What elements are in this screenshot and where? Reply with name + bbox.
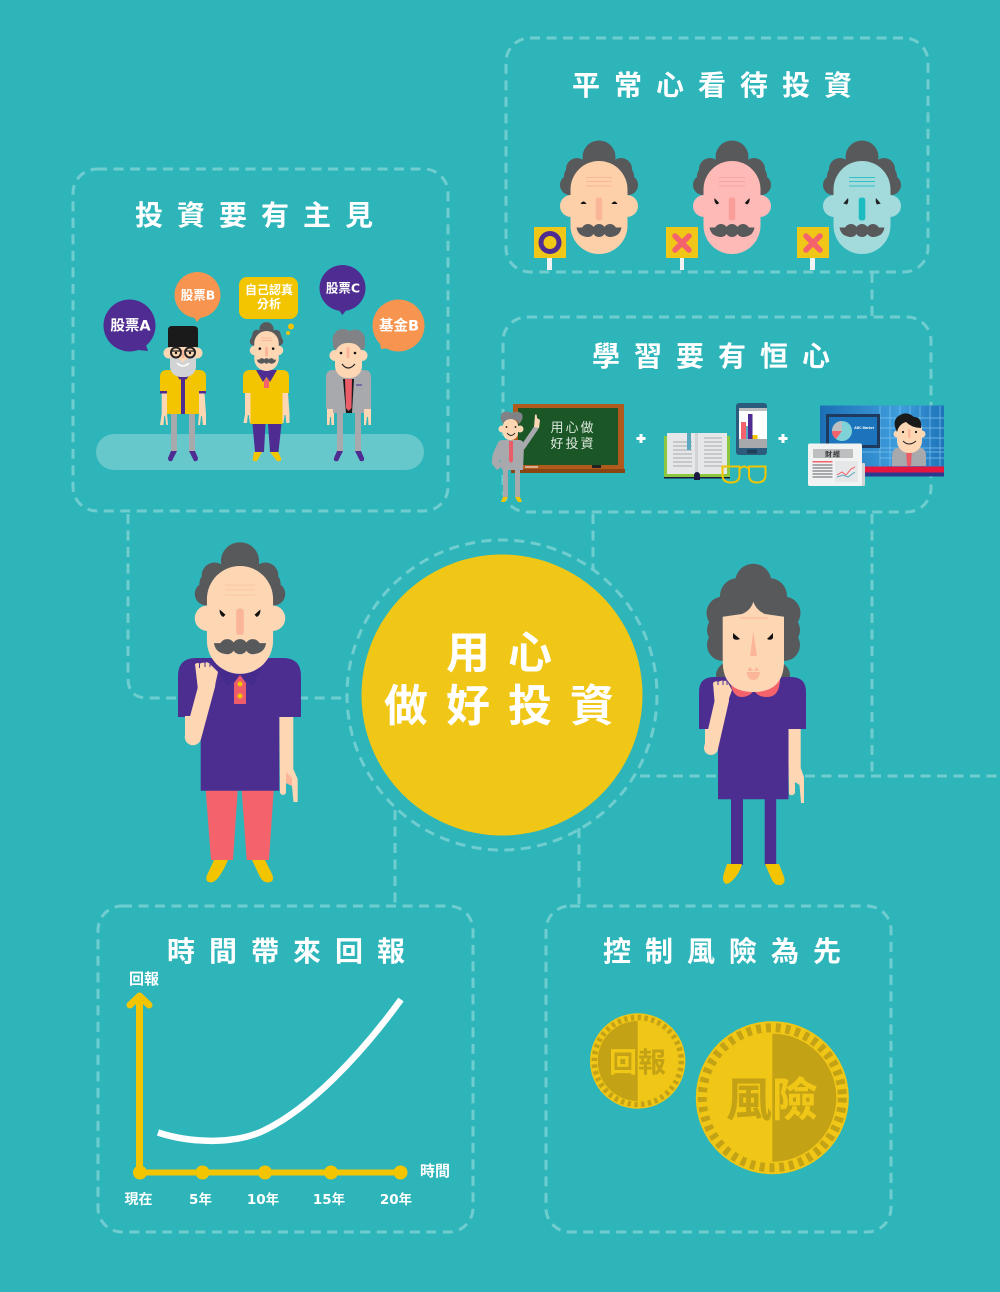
icon: plus sign (636, 434, 646, 443)
panel: calm mindset frame (506, 38, 928, 272)
heading: time brings returns: 時間帶來回報 (167, 936, 419, 967)
time tick labels: 10年 (247, 1191, 279, 1208)
return curve (158, 1000, 401, 1141)
heading: own opinion: 投資要有主見 (135, 200, 387, 231)
icon: glasses (722, 466, 766, 482)
figure: large man (178, 542, 301, 882)
icon: teacher at chalkboard: 好投資 (550, 436, 596, 451)
speech bubble: stock A: 股票A (110, 318, 151, 334)
icon: return coin (590, 1013, 685, 1109)
speech bubble: stock A (104, 300, 156, 352)
center dashed ring (347, 540, 657, 850)
thought bubble: own analysis: 自己認真 (245, 282, 293, 297)
time tick labels: 現在 (124, 1191, 152, 1208)
icon: financial news broadcast (820, 406, 944, 476)
figure: man in grey suit (326, 329, 371, 461)
icon: risk coin (696, 1021, 849, 1174)
icon: teacher at chalkboard: 用心做 (550, 420, 596, 435)
speech bubble: fund B (372, 300, 424, 352)
figure: large woman (699, 564, 806, 885)
panel: persistent learning frame (503, 317, 931, 512)
icon: book (664, 433, 730, 480)
panel: time brings returns frame (98, 906, 473, 1232)
axis label: time: 時間 (420, 1162, 450, 1180)
icon: greedy red face with reject sign (666, 140, 771, 270)
icon: risk coin: 險 (772, 1074, 818, 1126)
icon: newspaper (808, 444, 865, 486)
chart axes (130, 996, 408, 1180)
icon: risk coin: 風 (726, 1074, 772, 1126)
icon: newspaper: 財經 (825, 450, 841, 458)
thought bubble: own analysis: 分析 (257, 296, 281, 311)
speech bubble: stock C (320, 265, 366, 315)
line chart: time and return (124, 970, 450, 1208)
time tick labels (124, 1191, 412, 1208)
figure: man with glasses and beard (160, 326, 206, 461)
icon: financial news broadcast: ABC Market (854, 426, 875, 430)
figure: thoughtful man (243, 322, 290, 461)
heading: calm mindset: 平常心看待投資 (572, 70, 866, 101)
ground strip (96, 434, 424, 470)
speech bubble: stock B: 股票B (181, 288, 215, 302)
axis label: return: 回報 (129, 970, 159, 988)
center circle with main title: 做好投資 (384, 682, 632, 731)
center circle with main title: 用心 (446, 629, 570, 678)
icon: phone with bar chart (736, 403, 767, 455)
panel: risk control frame (546, 906, 891, 1232)
speech bubble: stock B (174, 272, 220, 322)
time tick labels: 5年 (189, 1191, 212, 1208)
heading: risk control: 控制風險為先 (603, 936, 855, 967)
icon: teacher at chalkboard (492, 404, 625, 502)
speech bubble: stock C: 股票C (326, 280, 360, 296)
icon: return coin: 報 (638, 1047, 666, 1078)
center circle with main title (362, 554, 642, 836)
panel: own opinion frame (73, 169, 448, 511)
thought bubble: own analysis (239, 277, 298, 335)
speech bubble: fund B: 基金B (379, 316, 419, 334)
heading: persistent learning: 學習要有恒心 (592, 341, 844, 372)
icon: calm face with approval sign (534, 140, 638, 270)
time tick labels: 15年 (313, 1191, 345, 1208)
connector lines (128, 273, 1000, 906)
icon: worried pale face with reject sign (797, 140, 901, 270)
time tick labels: 20年 (380, 1191, 412, 1208)
icon: return coin: 回 (609, 1047, 637, 1078)
icon: plus sign (778, 434, 788, 443)
